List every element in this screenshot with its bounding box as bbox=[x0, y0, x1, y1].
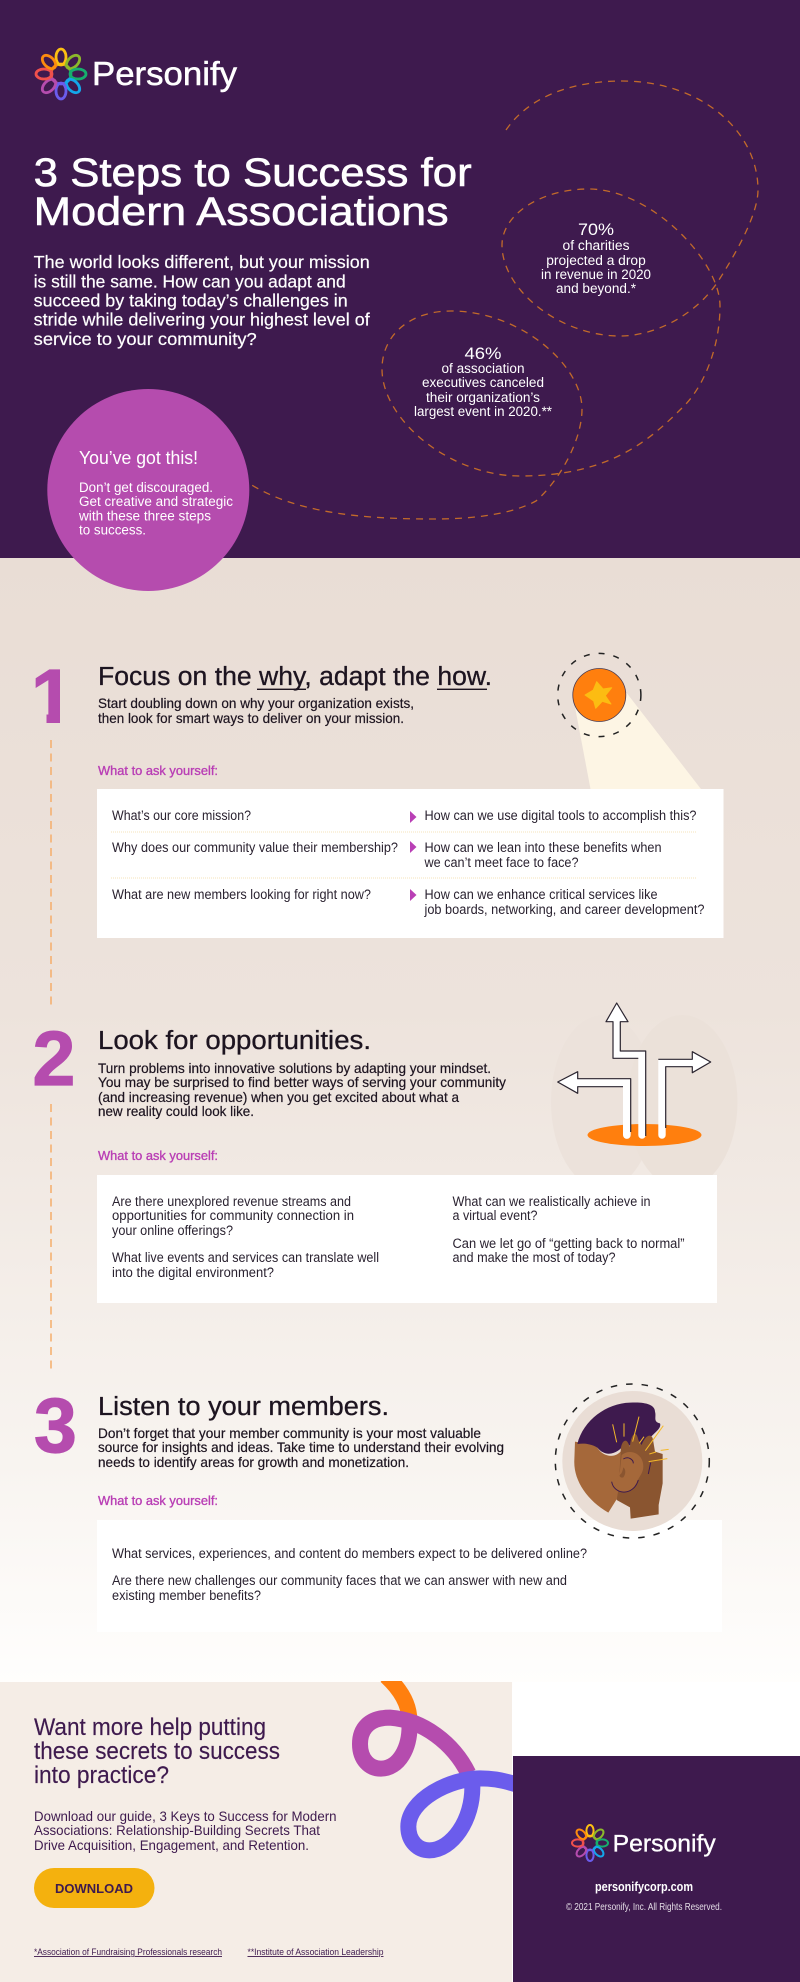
description: Don’t forget that your member community is your most valuable bbox=[98, 1425, 481, 1441]
stat: 46% of association executives: their organization’s bbox=[426, 390, 540, 405]
description: Turn problems into innovative solutions by adapting your mindset. bbox=[98, 1060, 491, 1076]
description: then look for smart ways to deliver on your mission. bbox=[98, 710, 404, 726]
cta heading: into practice? bbox=[34, 1762, 169, 1789]
number 3: 3 bbox=[34, 1383, 77, 1469]
stat: 70% of charities: in revenue in 2020 bbox=[541, 267, 651, 282]
question panel 2: What can we realistically achieve in bbox=[452, 1194, 650, 1209]
description bbox=[98, 1425, 504, 1470]
dashed looping path bbox=[250, 81, 758, 519]
question panel 2: opportunities for community connection in bbox=[112, 1208, 354, 1223]
cta text bbox=[34, 1808, 336, 1853]
question panel 1: job boards, networking, and career development? bbox=[424, 902, 704, 917]
question panel 3: existing member benefits? bbox=[112, 1588, 261, 1603]
dashed connector 1 to 2 bbox=[50, 740, 52, 1008]
heading: Listen to your members: Listen to your members. bbox=[98, 1393, 389, 1421]
question panel 1 bbox=[97, 789, 724, 938]
cta heading bbox=[34, 1714, 280, 1789]
decorative ribbon bbox=[360, 1676, 518, 1850]
label: what to ask yourself: What to ask yourself: bbox=[98, 1148, 218, 1163]
intro paragraph: is still the same. How can you adapt and bbox=[34, 271, 346, 291]
intro paragraph: service to your community? bbox=[34, 329, 257, 349]
step 3 bbox=[34, 1383, 722, 1632]
question panel 1: Why does our community value their membership? bbox=[112, 840, 398, 855]
icon: listening ear bbox=[555, 1384, 709, 1538]
question panel 2: Can we let go of “getting back to normal” bbox=[452, 1236, 684, 1251]
stat: 70% of charities bbox=[541, 220, 651, 296]
header panel bbox=[0, 0, 800, 558]
description: new reality could look like. bbox=[98, 1103, 254, 1119]
title: Modern Associations bbox=[34, 190, 449, 234]
button: download: DOWNLOAD bbox=[55, 1881, 133, 1896]
footnotes bbox=[34, 1947, 384, 1957]
question panel 2: a virtual event? bbox=[452, 1208, 538, 1223]
question panel 3 bbox=[97, 1520, 722, 1632]
description: (and increasing revenue) when you get excited about what a bbox=[98, 1089, 459, 1105]
cta text: Download our guide, 3 Keys to Success for Modern bbox=[34, 1808, 336, 1824]
intro paragraph bbox=[34, 252, 370, 349]
description: You may be surprised to find better ways of serving your community bbox=[98, 1074, 506, 1090]
heading: Focus on the why: Focus on the why, adapt the how. bbox=[98, 663, 492, 691]
icon: star spotlight bbox=[558, 653, 702, 790]
cta heading: these secrets to success bbox=[34, 1738, 280, 1765]
question panel 1: How can we lean into these benefits when bbox=[424, 840, 662, 855]
question panel 2: and make the most of today? bbox=[452, 1250, 616, 1265]
stat: 46% of association executives: of association bbox=[442, 361, 524, 376]
question panel 1: we can’t meet face to face? bbox=[424, 855, 578, 870]
intro paragraph: The world looks different, but your mission bbox=[34, 252, 370, 272]
label: what to ask yourself: What to ask yourself: bbox=[98, 1493, 218, 1508]
footnotes: **Institute of Association Leadership bbox=[248, 1947, 384, 1957]
callout: You've got this bbox=[47, 389, 249, 591]
question panel 2: your online offerings? bbox=[112, 1223, 233, 1238]
cta heading: Want more help putting bbox=[34, 1714, 266, 1741]
question panel 2 bbox=[97, 1175, 717, 1303]
dashed connector 2 to 3 bbox=[50, 1104, 52, 1372]
question panel 1: What are new members looking for right now? bbox=[112, 887, 371, 902]
callout: You've got this: with these three steps bbox=[78, 508, 211, 524]
logo: Personify: Personify bbox=[613, 1831, 716, 1858]
stat: 70% of charities: projected a drop bbox=[546, 253, 646, 268]
question panel 1: How can we enhance critical services like bbox=[424, 887, 658, 902]
cta text: Associations: Relationship-Building Secrets That bbox=[34, 1822, 320, 1838]
question panel 1: How can we use digital tools to accomplish this? bbox=[424, 808, 696, 823]
description bbox=[98, 1060, 506, 1119]
logo: Personify bbox=[572, 1825, 716, 1861]
intro paragraph: stride while delivering your highest level of bbox=[34, 310, 370, 330]
question panel 1: What’s our core mission? bbox=[112, 808, 251, 823]
icon: branching arrows bbox=[557, 1002, 735, 1175]
stat: 70% of charities: and beyond.* bbox=[556, 281, 637, 296]
callout: You've got this: Get creative and strategic bbox=[79, 494, 233, 509]
description: source for insights and ideas. Take time to understand their evolving bbox=[98, 1439, 504, 1455]
question panel 2: Are there unexplored revenue streams and bbox=[112, 1194, 351, 1209]
callout: You've got this: You’ve got this! bbox=[79, 447, 198, 468]
step 2 bbox=[32, 1003, 738, 1303]
intro paragraph: succeed by taking today’s challenges in bbox=[34, 290, 348, 310]
stat: 46% of association executives: 46% bbox=[464, 344, 502, 363]
body background bbox=[0, 558, 800, 1688]
stat: 70% of charities: 70% bbox=[578, 220, 614, 239]
logo: Personify bbox=[36, 49, 238, 99]
button: download bbox=[34, 1868, 154, 1908]
website: personifycorp.com bbox=[595, 1879, 693, 1894]
callout: You've got this: to success. bbox=[79, 523, 146, 538]
panel: footer brand bbox=[513, 1756, 800, 1982]
stat: 46% of association executives: executives canceled bbox=[422, 375, 544, 390]
footnotes: *Association of Fundraising Professionals research bbox=[34, 1947, 222, 1957]
stat: 46% of association executives bbox=[414, 344, 553, 419]
logo: Personify: Personify bbox=[92, 55, 238, 92]
stat: 70% of charities: of charities bbox=[562, 238, 630, 253]
question panel 3: What services, experiences, and content do members expect to be delivered online? bbox=[112, 1546, 587, 1561]
question panel 2: into the digital environment? bbox=[112, 1265, 274, 1280]
description: needs to identify areas for growth and monetization. bbox=[98, 1454, 409, 1470]
question panel 3: Are there new challenges our community faces that we can answer with new and bbox=[112, 1573, 567, 1588]
heading: Look for opportunities: Look for opportunities. bbox=[98, 1027, 371, 1055]
number 1: 1 bbox=[31, 654, 74, 740]
number 2: 2 bbox=[32, 1016, 75, 1102]
title bbox=[34, 151, 472, 234]
label: what to ask yourself: What to ask yourself: bbox=[98, 763, 218, 778]
callout: You've got this: Don’t get discouraged. bbox=[79, 480, 213, 495]
title: 3 Steps to Success for bbox=[34, 151, 472, 195]
white area behind footer bbox=[513, 1682, 800, 1756]
description bbox=[98, 695, 414, 726]
stat: 46% of association executives: largest event in 2020.** bbox=[414, 404, 553, 419]
step 1 bbox=[31, 653, 724, 938]
description: Start doubling down on why your organization exists, bbox=[98, 695, 414, 711]
cta text: Drive Acquisition, Engagement, and Retention. bbox=[34, 1837, 309, 1853]
question panel 2: What live events and services can translate well bbox=[112, 1250, 379, 1265]
copyright: © 2021 Personify, Inc. All Rights Reserved. bbox=[566, 1901, 722, 1913]
panel: download call to action bbox=[0, 1676, 518, 1982]
